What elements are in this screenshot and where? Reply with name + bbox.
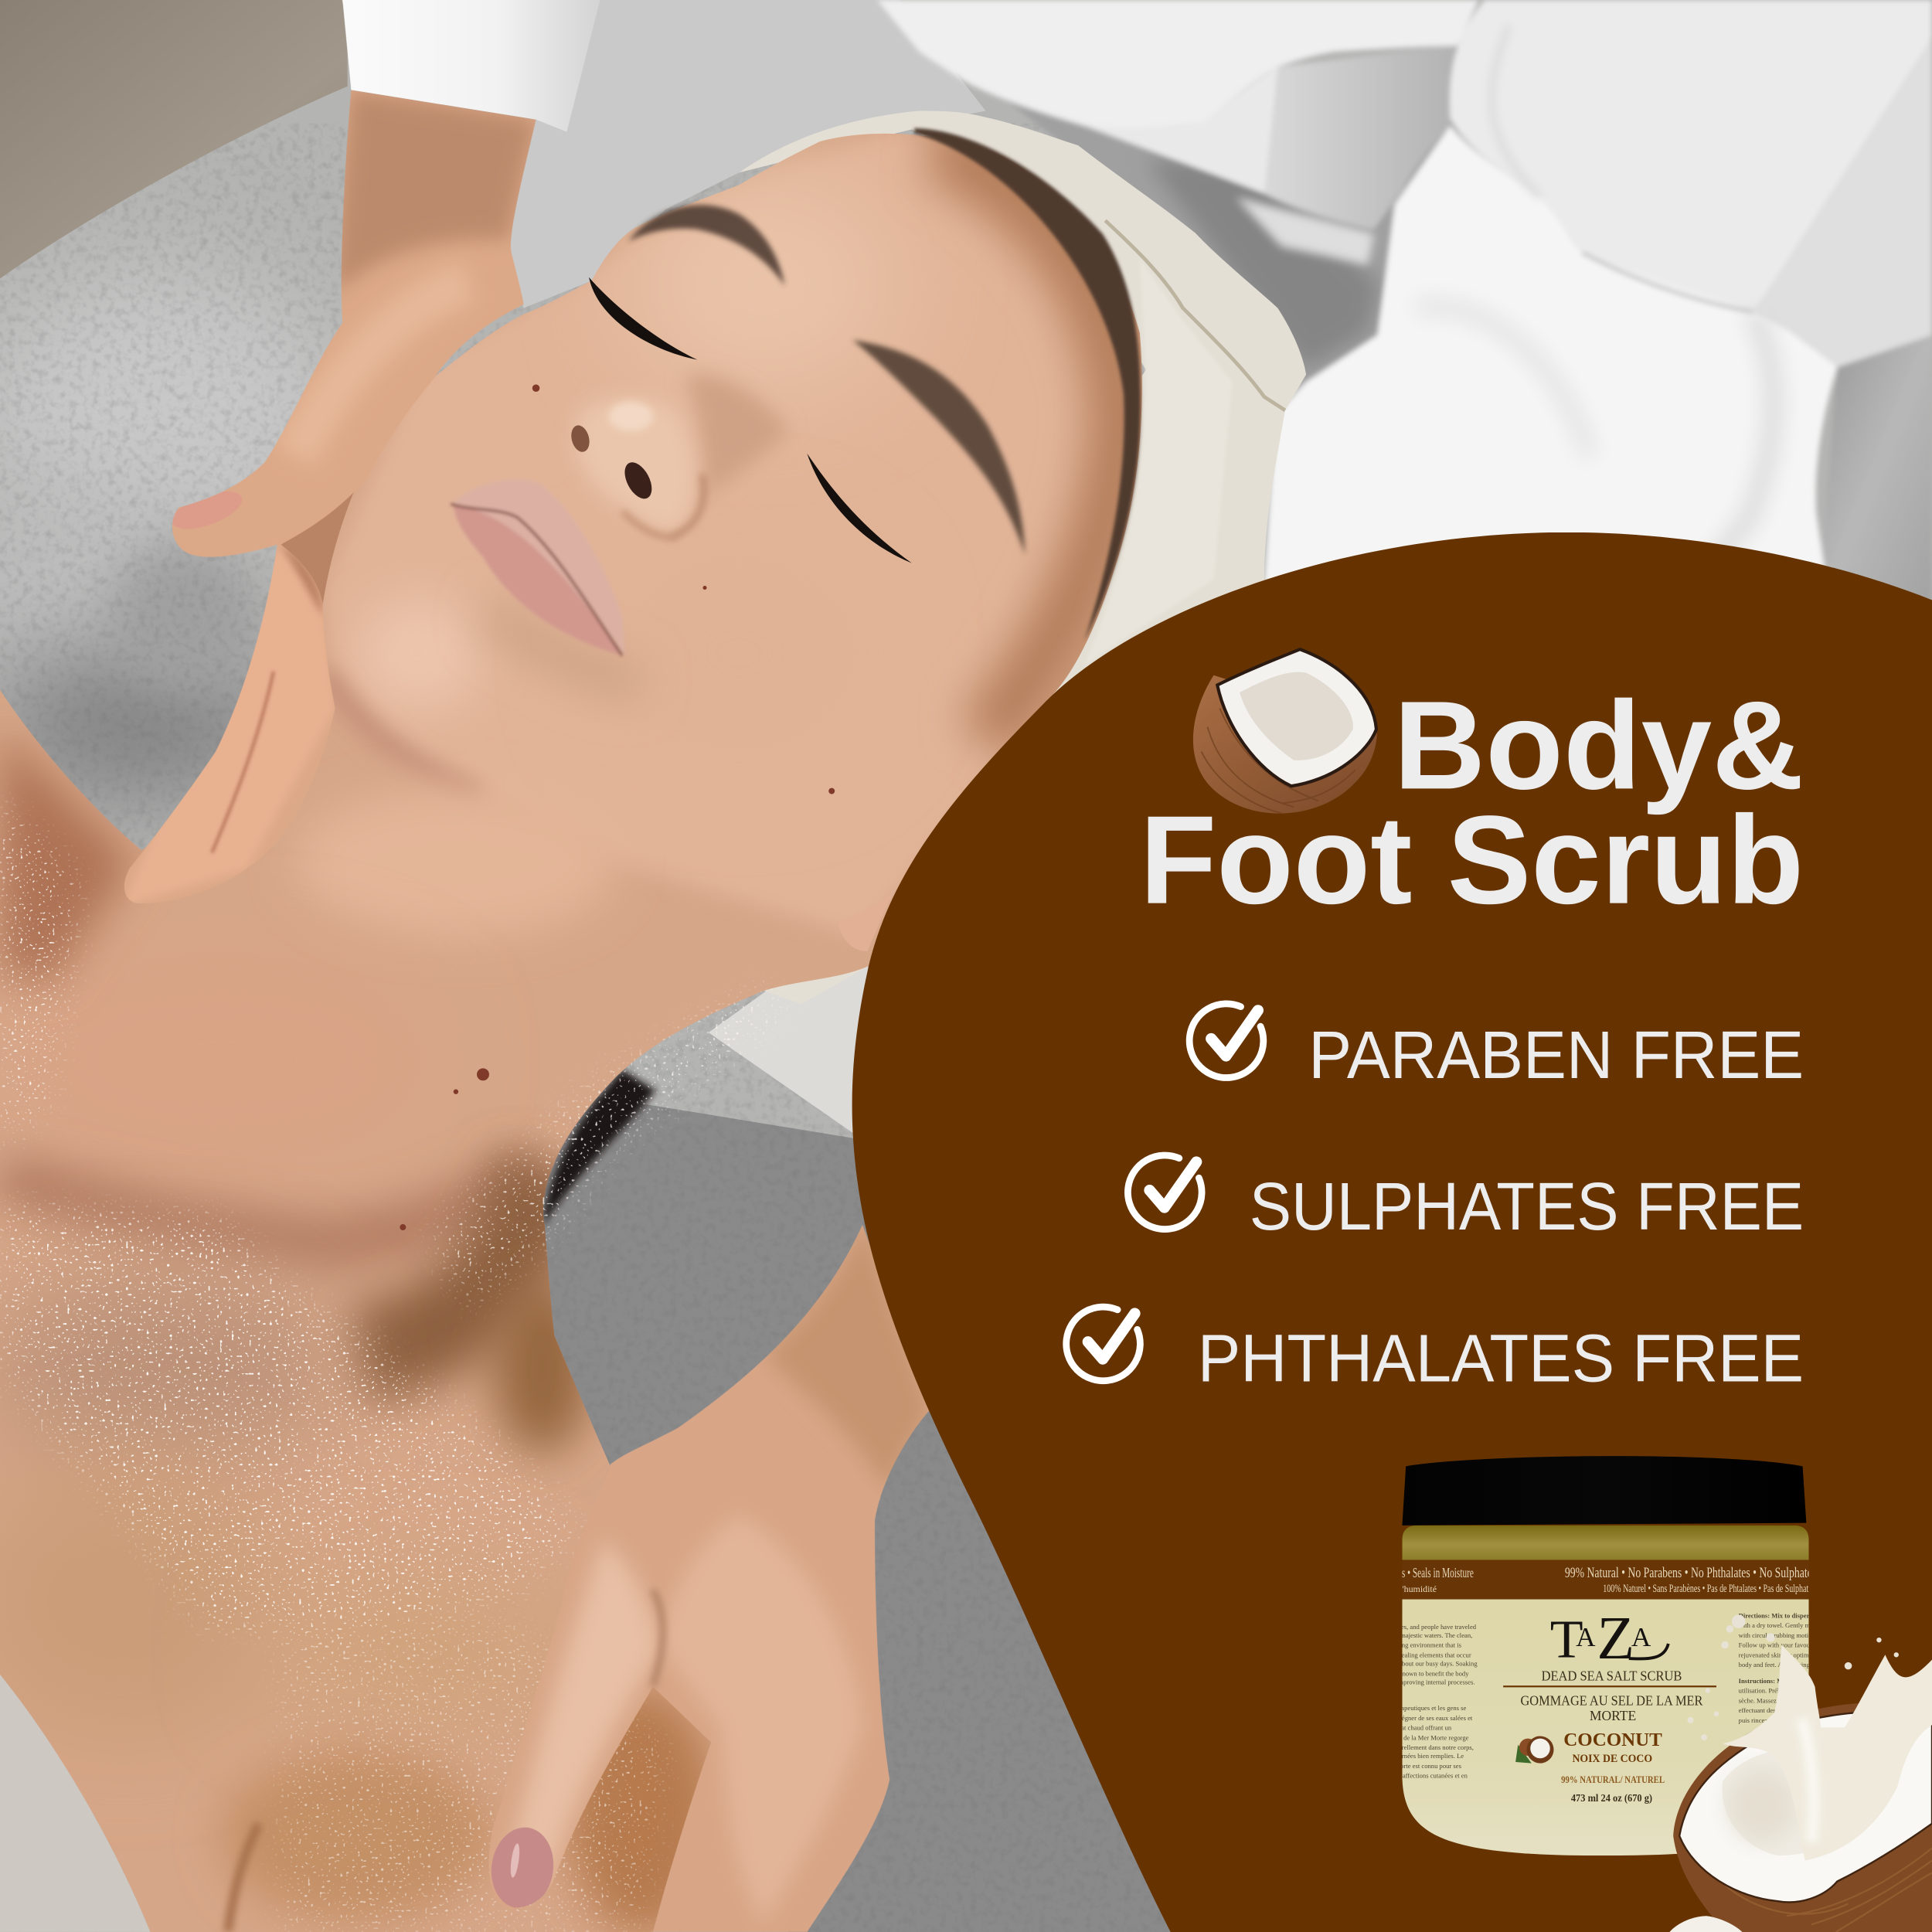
label left column: to soak in its salty, majestic waters. The clean, bbox=[1349, 1631, 1472, 1639]
coconut cavity bbox=[1722, 1747, 1889, 1855]
label left column: Le sel de la Mer Morte regorge bbox=[1386, 1733, 1469, 1741]
upper hand on jaw bbox=[124, 90, 536, 903]
label top text: 99% Natural • No Parabens • No Phthalates • No Sulphates bbox=[1565, 1565, 1816, 1581]
label right column: with circular rubbing motions bbox=[1739, 1631, 1818, 1639]
lower hand and arm bbox=[488, 1225, 929, 1932]
product name: GOMMAGE AU SEL DE LA MER bbox=[1520, 1693, 1703, 1709]
label left column: présents naturellement dans notre corps, bbox=[1367, 1743, 1474, 1751]
label top text bbox=[1342, 1565, 1816, 1595]
jar lid bbox=[1402, 1456, 1806, 1526]
label top text: Apaise • Scelle l'humidité bbox=[1342, 1583, 1437, 1594]
label left column: naturally in us as we go about our busy days. Soaking bbox=[1335, 1660, 1478, 1668]
label left column: de la Mer Morte est connu pour ses bbox=[1367, 1762, 1462, 1770]
label right column: sèche. Massez doucement bbox=[1739, 1696, 1808, 1704]
lower coat folds bbox=[1264, 126, 1837, 585]
claim: paraben free: PARABEN FREE bbox=[1308, 1017, 1804, 1093]
hair line bbox=[914, 128, 1141, 641]
face tones bbox=[323, 129, 1146, 937]
left eyebrow bbox=[628, 205, 785, 286]
salt grains on skin bbox=[0, 801, 788, 1932]
title line 1: Body& bbox=[1393, 675, 1804, 815]
product name bbox=[1503, 1668, 1716, 1723]
title bbox=[1140, 675, 1804, 930]
small coconut icon bbox=[1515, 1736, 1554, 1764]
right sleeve bbox=[1753, 39, 1932, 367]
claim: paraben free bbox=[1189, 1004, 1804, 1093]
label left column bbox=[1335, 1623, 1478, 1780]
coat fold shadows bbox=[1417, 307, 1590, 456]
jaw shadow bbox=[323, 672, 481, 794]
label right column bbox=[1739, 1611, 1828, 1724]
logo: TAZA: Z bbox=[1597, 1604, 1634, 1672]
moles bbox=[400, 384, 835, 1230]
milk splash bbox=[1723, 1645, 1932, 1861]
flavour text: 99% NATURAL/ NATUREL bbox=[1561, 1774, 1665, 1785]
label right column: utilisation. Prélevez le gommage bbox=[1739, 1687, 1826, 1695]
right eyebrow bbox=[852, 340, 1026, 554]
coat cuff bbox=[342, 0, 600, 132]
right grey backdrop bbox=[1821, 335, 1932, 604]
product jar bbox=[1335, 1456, 1828, 1858]
logo: TAZA: T bbox=[1550, 1609, 1583, 1669]
label top text: 100% Naturel • Sans Parabènes • Pas de Phtalates • Pas de Sulphates bbox=[1603, 1583, 1815, 1595]
towel under head bbox=[709, 949, 869, 1140]
title line 2: Foot Scrub bbox=[1140, 791, 1804, 930]
wall top left bbox=[0, 0, 348, 278]
towel texture bbox=[0, 123, 1207, 1932]
label left column: therapeutic properties, and people have traveled bbox=[1349, 1623, 1477, 1631]
dark crescent shadow under neck bbox=[543, 1070, 655, 1226]
label right column: Directions: Mix to disperse bbox=[1739, 1611, 1815, 1619]
neck and chest tones bbox=[296, 788, 616, 937]
product name: MORTE bbox=[1590, 1708, 1636, 1723]
claim: phthalates free bbox=[1066, 1307, 1804, 1396]
logo: TAZA: A bbox=[1576, 1622, 1596, 1652]
left eye bbox=[589, 277, 697, 360]
label right column: Instructions: Mélangez bbox=[1739, 1677, 1804, 1685]
product name: DEAD SEA SALT SCRUB bbox=[1542, 1668, 1682, 1684]
label right column: Follow up with your favourite bbox=[1739, 1641, 1818, 1649]
label right column: body and feet. Avoid using bbox=[1739, 1661, 1811, 1668]
flavour text: 473 ml 24 oz (670 g) bbox=[1571, 1792, 1652, 1804]
dark towel lower right bbox=[524, 1084, 1183, 1932]
label left column: propriétés thérapeutiques et les gens se bbox=[1362, 1704, 1467, 1712]
icon: coconut half bbox=[1193, 649, 1377, 814]
hairline darkening bbox=[937, 148, 1121, 740]
label left column: in the Dead Sea is known to benefit the body bbox=[1349, 1669, 1469, 1677]
flavour text bbox=[1561, 1730, 1665, 1804]
claim: sulphates free bbox=[1128, 1155, 1804, 1244]
label left column: déplacent pour imprégner de ses eaux salées et bbox=[1349, 1714, 1473, 1722]
ear bbox=[838, 893, 892, 951]
claim: sulphates free: SULPHATES FREE bbox=[1250, 1168, 1804, 1244]
label right column: effectuant des mouvements bbox=[1739, 1706, 1811, 1714]
lips bbox=[451, 480, 624, 655]
nose bbox=[569, 374, 788, 537]
flavour text: NOIX DE COCO bbox=[1572, 1753, 1652, 1765]
jar body bbox=[1335, 1526, 1828, 1858]
milk pool bottom bbox=[1669, 1916, 1742, 1932]
white coat right bbox=[877, 0, 1932, 604]
icon: check bbox=[1189, 1004, 1264, 1078]
white flesh bbox=[1679, 1712, 1932, 1902]
shaded panel bbox=[1196, 46, 1458, 230]
towel light and dark patches bbox=[0, 271, 345, 801]
logo: TAZA: A bbox=[1631, 1622, 1651, 1652]
coconut and milk splash bbox=[1669, 1614, 1932, 1932]
claim: phthalates free: PHTHALATES FREE bbox=[1198, 1320, 1804, 1396]
label left column: skin condition and improving internal processes. bbox=[1345, 1679, 1475, 1686]
right eye bbox=[807, 454, 912, 563]
icon: check bbox=[1066, 1307, 1140, 1381]
label left column: de nos journées bien remplies. Le bbox=[1375, 1752, 1464, 1760]
label left column: climate provides healing environment that is bbox=[1343, 1641, 1462, 1649]
sheet top centre bbox=[505, 0, 986, 308]
panel: brown blob bbox=[852, 532, 1932, 1932]
shell bbox=[1673, 1702, 1932, 1932]
label right column: rejuvenated skin for optimal bbox=[1739, 1651, 1814, 1658]
label left column: filled with natural healing elements that occur bbox=[1349, 1651, 1471, 1658]
label right column: puis rincez. Appliquez bbox=[1739, 1716, 1798, 1724]
upper sleeve bbox=[1450, 0, 1932, 311]
headband bbox=[740, 111, 1306, 1004]
dark crevice bbox=[974, 74, 1478, 394]
palm shadow behind thumb bbox=[278, 471, 369, 606]
label top text: Soothes • Seals in Moisture bbox=[1378, 1565, 1474, 1580]
skin: face, neck and chest bbox=[0, 0, 1158, 1932]
milk droplets bbox=[1688, 1614, 1899, 1740]
icon: check bbox=[1128, 1155, 1202, 1230]
upper coat flap bbox=[877, 0, 1478, 128]
flavour text: COCONUT bbox=[1563, 1730, 1662, 1750]
white sheet bottom left bbox=[0, 1675, 151, 1932]
label left column: climat chaud offrant un bbox=[1389, 1724, 1452, 1732]
label right column: with a dry towel. Gently massage bbox=[1739, 1621, 1828, 1629]
logo: TAZA bbox=[1550, 1604, 1668, 1672]
label left column: à traiter les affections cutanées et en bbox=[1372, 1772, 1468, 1780]
